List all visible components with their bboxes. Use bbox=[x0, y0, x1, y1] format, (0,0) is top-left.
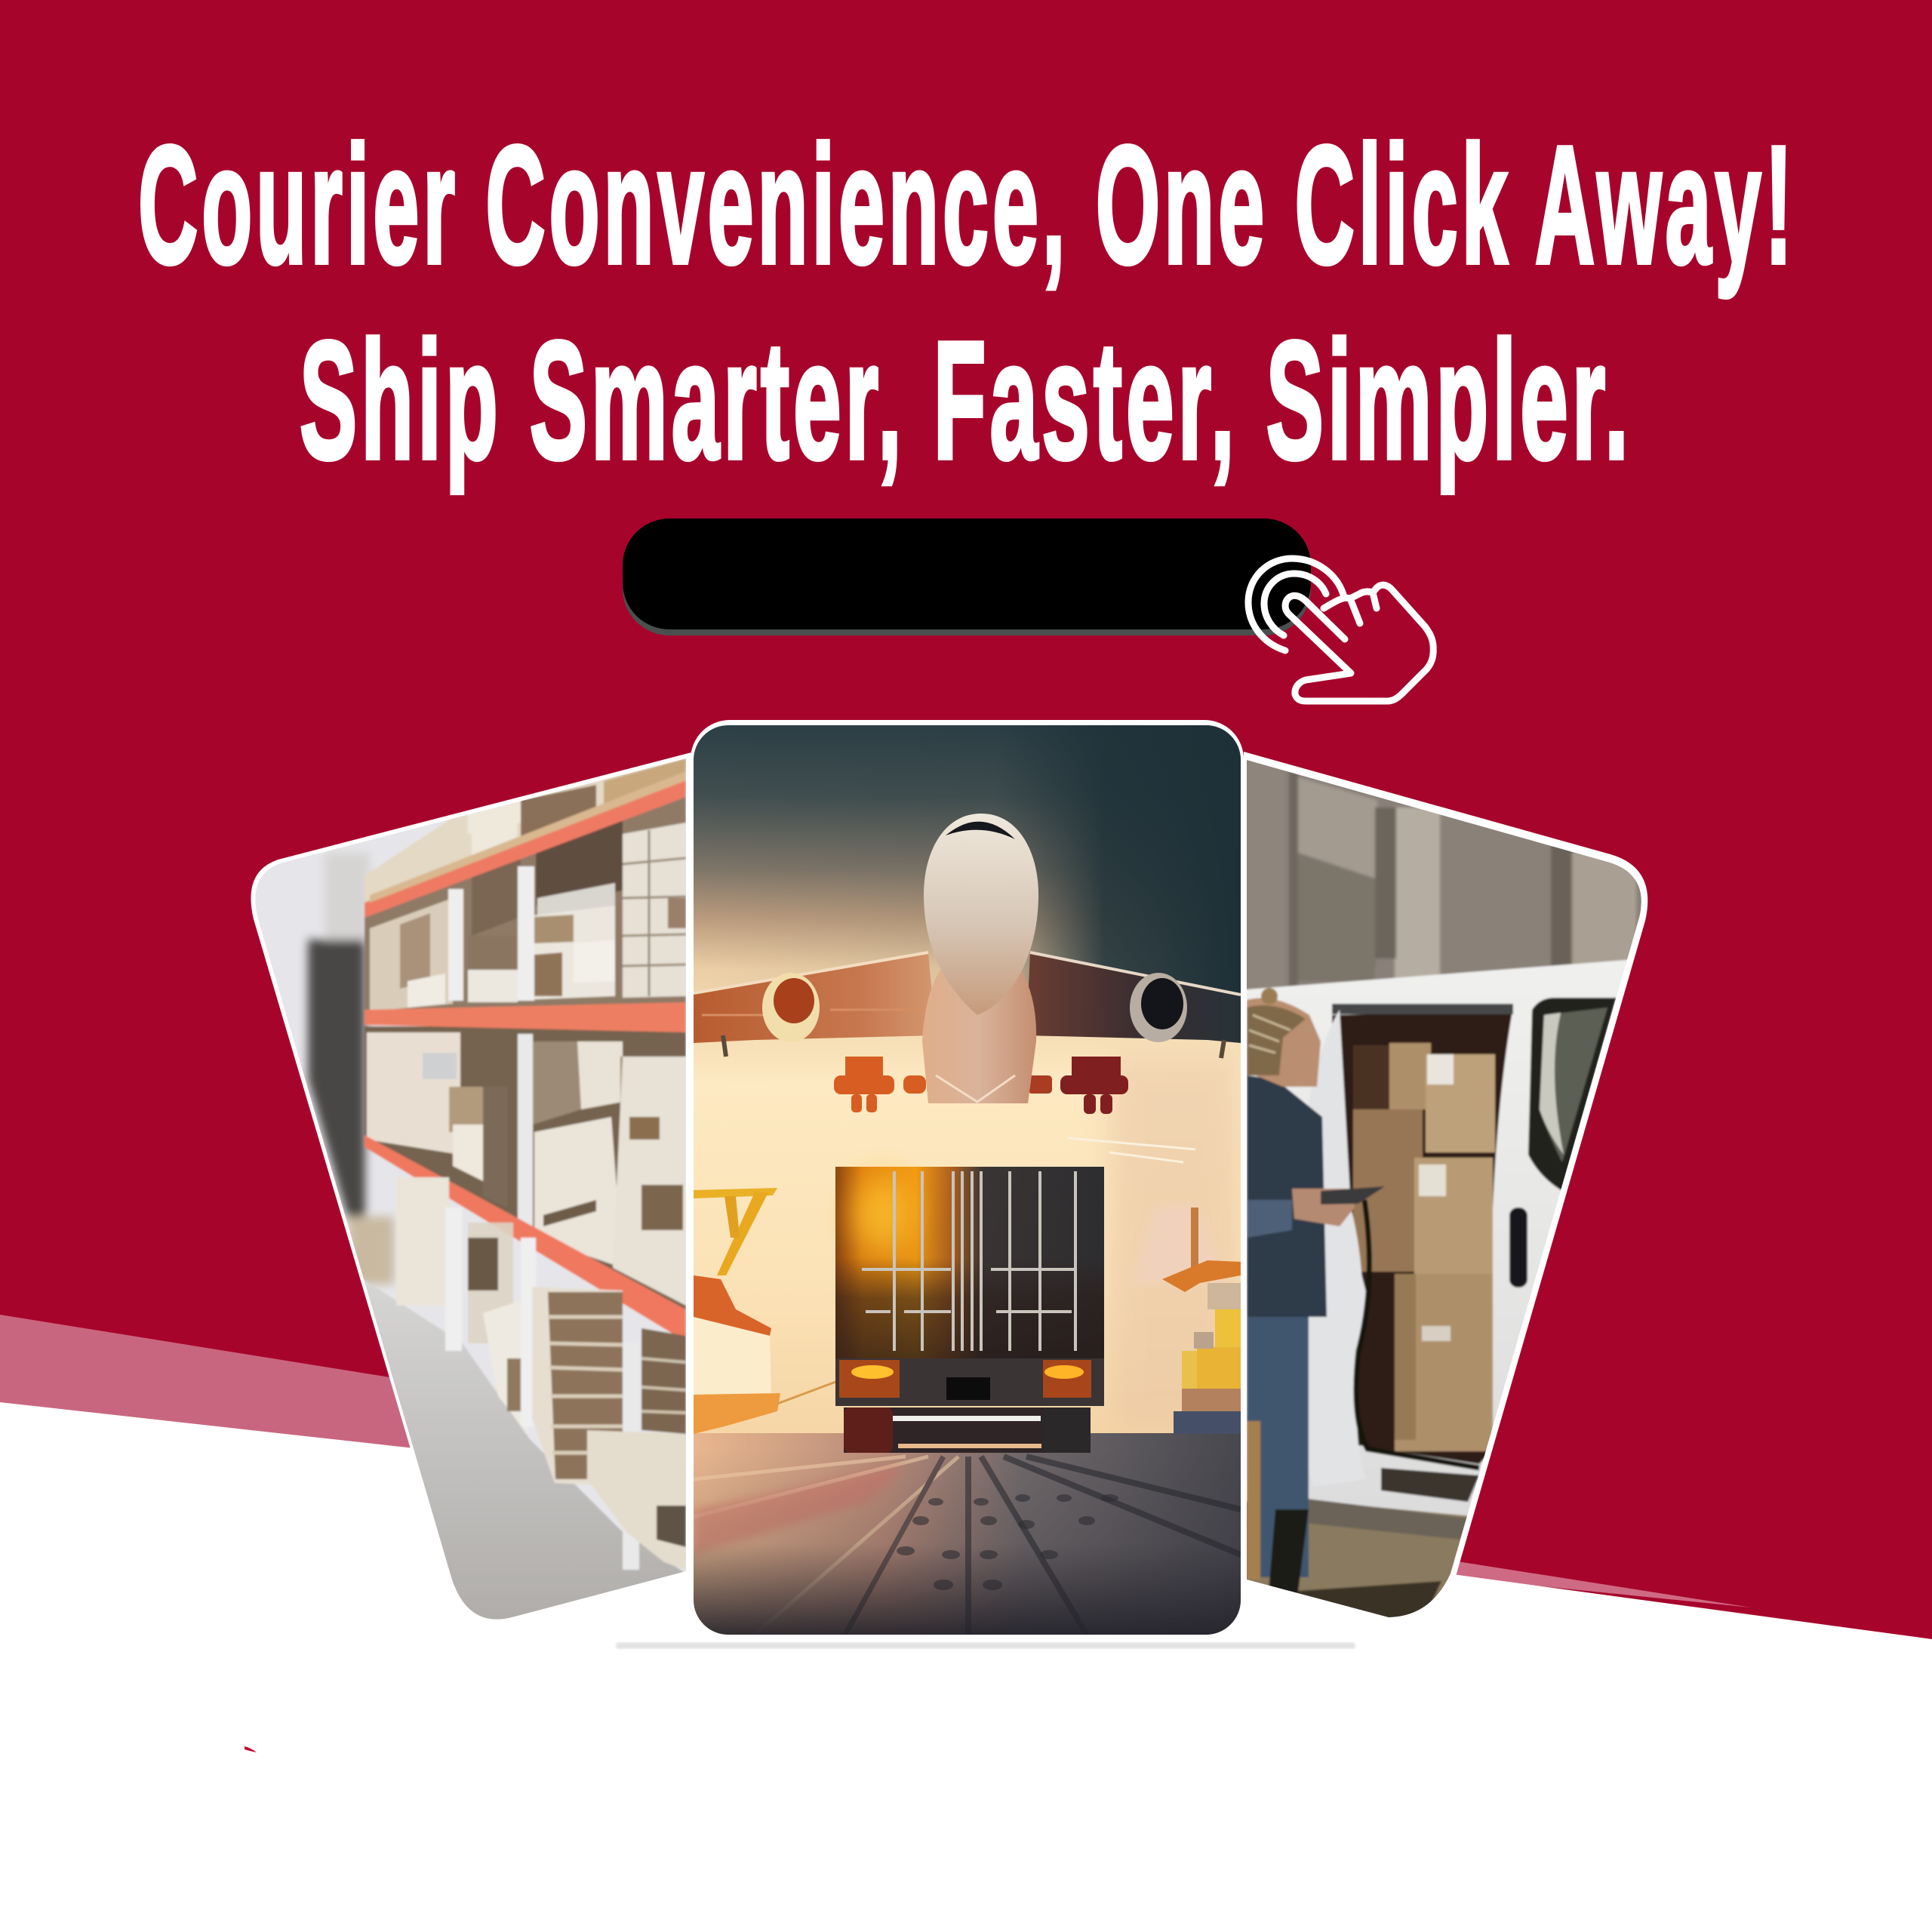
right landing gear bbox=[1028, 1057, 1128, 1114]
concrete floor bbox=[364, 1278, 685, 1620]
white van body bbox=[1238, 958, 1660, 1517]
wooden crate edge bbox=[1247, 1421, 1260, 1580]
orange rack beam bottom bbox=[365, 1135, 686, 1342]
road tread dots bbox=[897, 1494, 1118, 1590]
sky gradient bbox=[694, 725, 1241, 1442]
orange glow bbox=[854, 1177, 912, 1253]
warm haze at right bbox=[1109, 1057, 1241, 1434]
icon: pointing hand with tap ripples bbox=[1248, 558, 1433, 701]
cargo boxes bbox=[1353, 1043, 1495, 1451]
number plate bbox=[946, 1377, 990, 1400]
garage wall bbox=[1247, 760, 1641, 990]
warehouse back wall bbox=[255, 758, 686, 1572]
orange rack beam middle bbox=[365, 1002, 686, 1032]
inner tap ripple bbox=[1264, 574, 1326, 635]
tiny red speck bbox=[245, 1746, 257, 1752]
courier figure bbox=[1247, 988, 1385, 1600]
left dock crane and ship bbox=[694, 1188, 838, 1434]
van sill bbox=[1283, 1496, 1468, 1540]
truck container bbox=[835, 1167, 1104, 1406]
orange rack beam top bbox=[365, 780, 686, 918]
background: pink diagonal band right bbox=[1453, 1561, 1751, 1607]
lower-body chevron bbox=[936, 1075, 1015, 1102]
left landing gear bbox=[834, 1057, 926, 1112]
truck bbox=[835, 1167, 1104, 1453]
contrails bbox=[1068, 1138, 1195, 1162]
wood on top beam bbox=[370, 771, 686, 903]
truck bumper bbox=[835, 1358, 1104, 1406]
right dock crane and containers bbox=[1132, 1204, 1241, 1434]
rack uprights bbox=[448, 889, 463, 1001]
black pill button bbox=[623, 518, 1311, 635]
airplane bbox=[694, 814, 1241, 1114]
under-ride bar and wheels bbox=[844, 1407, 1091, 1453]
center photo card: plane and truck bbox=[691, 720, 1244, 1638]
flap tips bbox=[723, 1035, 1224, 1058]
dark sky at right bbox=[694, 725, 1241, 997]
pallet stack front bbox=[587, 1430, 686, 1570]
tail light left bbox=[839, 1360, 900, 1398]
fuselage nose bbox=[924, 814, 1038, 1015]
upper bay bbox=[365, 789, 686, 1015]
floor beneath van bbox=[1238, 1502, 1479, 1630]
lower bay bbox=[365, 1026, 686, 1313]
below-beam stacks bbox=[396, 1177, 449, 1306]
van cab window bbox=[1528, 998, 1617, 1191]
background: white lower area bbox=[0, 1402, 1932, 1932]
road fade at bottom bbox=[694, 1449, 1241, 1638]
fuselage lower bbox=[922, 966, 1036, 1103]
ground shadow under center card bbox=[616, 1642, 1355, 1649]
door wave seal bbox=[1356, 1200, 1479, 1468]
right photo card: courier with van bbox=[1238, 747, 1660, 1630]
road bbox=[694, 1433, 1241, 1637]
container bars bbox=[862, 1171, 1075, 1351]
brown carton stack bbox=[532, 1287, 623, 1487]
title bbox=[138, 112, 1796, 494]
van cargo opening bbox=[1332, 1011, 1512, 1464]
blurred machine at aisle end bbox=[308, 853, 394, 1284]
van sliding door bbox=[1304, 1010, 1366, 1487]
van door handle bbox=[1509, 1208, 1527, 1287]
right engine bbox=[1130, 973, 1187, 1042]
upper storage bbox=[365, 758, 686, 903]
right wing bbox=[1026, 952, 1241, 1043]
background: pink diagonal band left bbox=[0, 1315, 423, 1453]
left photo card: warehouse shelves bbox=[242, 747, 694, 1638]
hand outline bbox=[1285, 585, 1433, 701]
road glow band bbox=[694, 1464, 906, 1555]
left wing bbox=[694, 952, 936, 1043]
outer tap ripple bbox=[1248, 558, 1343, 651]
cockpit window bbox=[946, 822, 1015, 839]
road tracks bbox=[694, 1457, 1241, 1635]
left engine bbox=[762, 973, 820, 1042]
tail light right bbox=[1043, 1360, 1091, 1398]
dark lower container bbox=[835, 1167, 1104, 1406]
